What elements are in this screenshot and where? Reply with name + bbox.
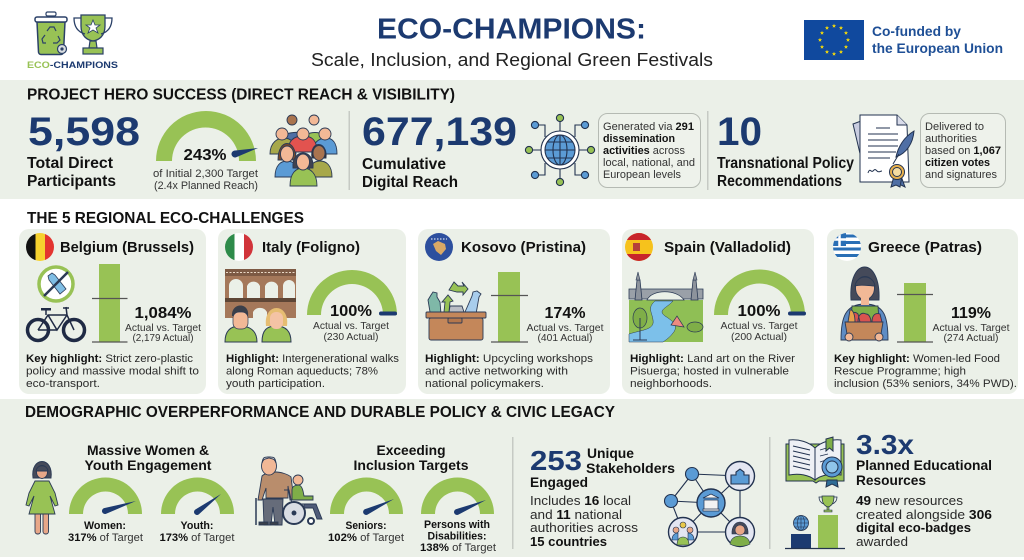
stat: policy recommendations [717,110,854,190]
highlight text: Highlight: Upcycling workshops [425,353,594,365]
icon: bicycle [28,307,84,340]
callout: dissemination: dissemination [603,133,675,145]
callout: citizen votes: authorities [925,133,977,145]
flag: Italy [225,233,254,261]
subheading: inclusion targets [354,442,469,473]
panel: Kosovo: 174% [544,305,586,322]
gauge: Spain 100 percent: 100% [738,303,780,320]
panel: Belgium: (2,179 Actual) [132,333,194,344]
highlight text [630,353,795,390]
gauge: youth 173 percent: Youth: [180,520,214,532]
gauge: persons with disabilities 138 percent: Persons with [424,519,490,531]
panel: Italy: Italy (Foligno) [262,239,360,256]
gauge: seniors 102 percent: 102% of Target [328,532,404,544]
callout: citizen votes: and signatures [925,169,997,181]
gauge: persons with disabilities 138 percent: 138% of Target [420,542,496,554]
highlight text: Key highlight: Strict zero-plastic [26,353,194,365]
icon: woman [26,462,58,534]
stat: policy recommendations: Recommendations [717,173,842,190]
subheading: women and youth: Youth Engagement [84,457,212,473]
stat: total direct participants: Total Direct [27,155,113,172]
bar chart: Greece [897,283,933,342]
highlight text: along Roman aqueducts; 78% [226,366,378,378]
stat: total direct participants: Participants [27,173,116,190]
stat: 253 stakeholders [530,445,675,549]
flag: Belgium [26,233,54,261]
gauge: seniors 102 percent: Seniors: [346,520,386,532]
panel: Belgium [19,229,206,394]
gauge: Italy 100 percent: Actual vs. Target [313,321,389,332]
highlight text: national policymakers. [425,378,544,390]
gauge: 243 percent [153,111,258,192]
stat: 3.3x educational resources [856,429,992,549]
gauge: women 317 percent: Women: [84,520,126,532]
highlight text [834,353,1017,390]
panel: Spain: Spain (Valladolid) [664,239,791,256]
highlight text: inclusion (53% seniors, 34% PWD). [834,378,1017,390]
gauge: seniors 102 percent [328,478,404,544]
stat: 253 stakeholders: authorities across [530,521,638,535]
icon: signed document [853,115,914,187]
gauge: youth 173 percent: 173% of Target [160,532,234,544]
callout: dissemination: European levels [603,169,681,181]
icon: upcycling box [426,282,486,340]
gauge: Spain 100 percent: Actual vs. Target [720,321,798,332]
stat: cumulative digital reach: Cumulative [362,156,446,173]
panel: Greece: Actual vs. Target [932,323,1010,334]
callout: citizen votes: Delivered to [925,121,984,133]
icon: podium chart with trophy and globe [785,496,845,548]
heading: regional eco-challenges: THE 5 REGIONAL ECO-CHALLENGES [27,210,304,227]
highlight text: eco-transport. [26,378,100,390]
highlight text: policy and massive modal shift to [26,366,199,378]
callout: dissemination: local, national, and [603,157,695,169]
highlight text: Pisuerga; hosted in vulnerable [630,366,789,378]
stat: cumulative digital reach: 677,139 [362,110,517,154]
panel: Belgium: 1,084% [134,305,192,322]
subheading: inclusion targets: Exceeding [376,442,446,458]
icon: woman with food box [841,267,888,341]
title: Scale, Inclusion, and Regional Green Festivals [311,50,713,70]
callout: dissemination [598,114,700,188]
flag: Greece [833,233,861,261]
stat: 3.3x educational resources: 3.3x [856,429,915,460]
panel: Belgium: Actual vs. Target [125,323,201,334]
callout: dissemination: Generated via 291 [603,121,694,133]
highlight text: Highlight: Land art on the River [630,353,795,365]
panel: Italy [218,229,406,394]
stat: 253 stakeholders: Unique [587,445,634,461]
stat: cumulative digital reach [362,110,517,191]
highlight text: and active networking with [425,366,568,378]
gauge: 243 percent: of Initial 2,300 Target [153,168,258,180]
gauge: women 317 percent [68,478,143,544]
stat: 3.3x educational resources: created alongside 306 [856,508,992,522]
stat: 253 stakeholders: and 11 national [530,508,622,522]
highlight text: Highlight: Intergenerational walks [226,353,400,365]
title: ECO-CHAMPIONS: [377,14,646,46]
stat: policy recommendations: 10 [717,110,762,154]
stat: 3.3x educational resources: awarded [856,535,908,549]
icon: open book with award ribbon [786,437,844,487]
panel: Kosovo [418,229,610,394]
bar chart: Belgium [92,264,128,342]
heading: demographic overperformance: DEMOGRAPHIC OVERPERFORMANCE AND DURABLE POLICY & CIVIC LEGACY [25,404,616,421]
icon: no plastic bottle [39,267,73,301]
highlight text [26,353,199,390]
gauge: women 317 percent: 317% of Target [68,532,143,544]
gauge: Italy 100 percent: 100% [330,303,372,320]
flag: Kosovo [425,233,453,261]
gauge: 243 percent: 243% [184,147,226,164]
logo: eco-champions: ECO-CHAMPIONS [27,60,118,71]
panel: Greece: Greece (Patras) [868,239,982,256]
panel: Kosovo: (401 Actual) [538,333,592,344]
stat: 3.3x educational resources: Resources [856,472,926,488]
stat: cumulative digital reach: Digital Reach [362,174,458,191]
stat: policy recommendations: Transnational Policy [717,155,854,172]
EU co-funded logo [804,20,1003,60]
icon: group of people [270,115,337,186]
gauge: persons with disabilities 138 percent: Disabilities: [428,530,486,542]
panel: Kosovo: Kosovo (Pristina) [461,239,586,256]
heading: project hero success: PROJECT HERO SUCCESS (DIRECT REACH & VISIBILITY) [27,86,455,104]
subheading: women and youth: Massive Women & [87,442,209,458]
panel: Greece: 119% [951,305,991,322]
stat: 253 stakeholders: Includes 16 local [530,494,631,508]
bar chart: Kosovo [491,272,528,342]
stat: 3.3x educational resources: Planned Educational [856,457,992,473]
subheading: inclusion targets: Inclusion Targets [354,457,469,473]
stat: 3.3x educational resources: digital eco-badges [856,521,971,535]
callout: dissemination: activities across [603,145,685,157]
stat: total direct participants: 5,598 [28,110,140,154]
gauge: Italy 100 percent: (230 Actual) [324,332,378,343]
highlight text: neighborhoods. [630,378,712,390]
gauge: Italy 100 percent [307,270,397,343]
panel: Spain [622,229,814,394]
title [311,14,713,70]
highlight text [226,353,400,390]
stat: total direct participants [27,110,140,190]
gauge: Spain 100 percent [714,270,806,343]
panel: Greece [827,229,1018,394]
highlight text [425,353,594,390]
gauge: Spain 100 percent: (200 Actual) [731,332,787,343]
stat: 253 stakeholders: Engaged [530,474,588,490]
gauge: persons with disabilities 138 percent [420,478,496,554]
subheading: women and youth [84,442,212,473]
icon: river and bridge [629,272,703,342]
icon: globe network [525,114,595,186]
stat: 253 stakeholders: 253 [530,445,582,476]
icon: senior and wheelchair user [256,457,322,525]
EU co-funded logo: Co-funded by [872,24,961,39]
callout: citizen votes [920,114,1006,188]
highlight text: youth participation. [226,378,325,390]
logo: eco-champions [27,12,118,71]
panel: Belgium: Belgium (Brussels) [60,239,194,256]
callout: citizen votes: based on 1,067 [925,145,1001,157]
panel: Kosovo: Actual vs. Target [526,323,604,334]
stat: 253 stakeholders: Stakeholders [586,460,675,476]
callout: citizen votes: citizen votes [925,157,990,169]
gauge: youth 173 percent [160,478,234,544]
stat: 3.3x educational resources: 49 new resources [856,494,963,508]
flag: Spain [625,233,653,261]
EU co-funded logo: the European Union [872,41,1003,56]
icon: stakeholder network [664,462,754,546]
highlight text: Key highlight: Women-led Food [834,353,1000,365]
highlight text: Rescue Programme; high [834,366,966,378]
icon: aqueduct and youth [225,269,296,342]
gauge: 243 percent: (2.4x Planned Reach) [154,180,258,192]
stat: 253 stakeholders: 15 countries [530,535,607,549]
panel: Greece: (274 Actual) [944,333,998,344]
